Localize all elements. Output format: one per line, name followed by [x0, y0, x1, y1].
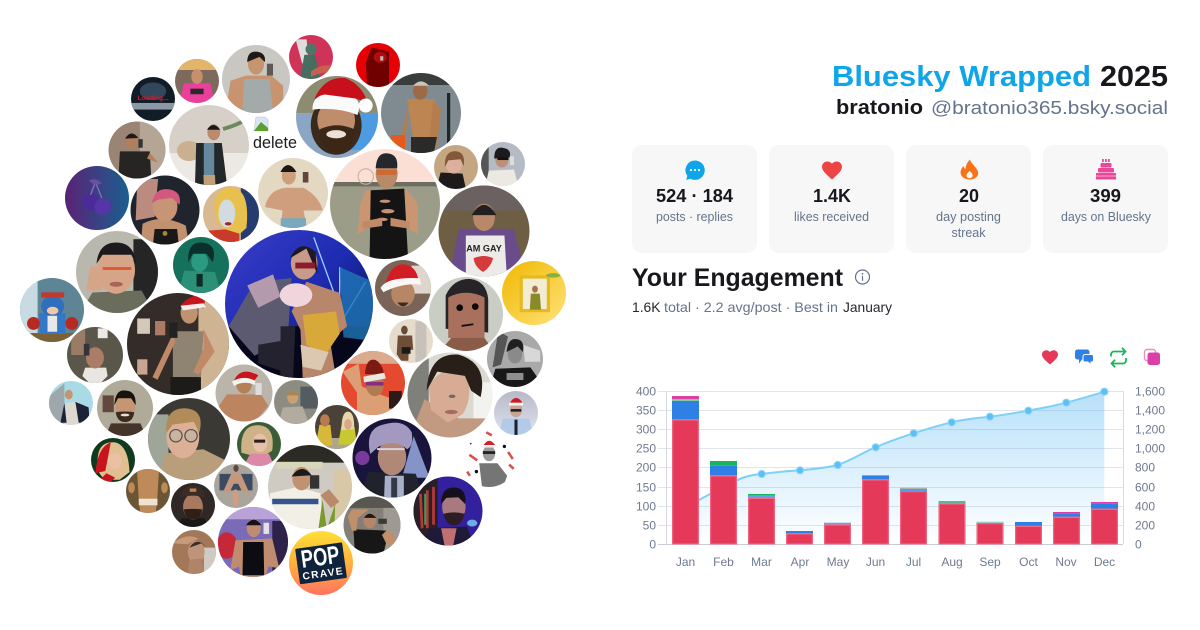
avatar: santa mirror bookshelf	[127, 293, 234, 395]
combo chart: monthly engagement	[636, 384, 1165, 569]
avatar: wet hair portrait	[408, 352, 495, 438]
icon: info	[856, 270, 870, 284]
avatar: roblox face	[429, 277, 503, 351]
icon: legend quotes	[1144, 350, 1160, 365]
avatar: broken image placeholder	[253, 117, 297, 152]
avatar: neon purple beard	[414, 476, 482, 546]
avatar: santa muscle	[216, 364, 272, 422]
stat label: day posting	[936, 210, 1001, 224]
bar: Oct	[1015, 522, 1042, 544]
bar: Aug	[938, 501, 966, 544]
month labels: Jun	[866, 555, 885, 569]
avatar: drag queens	[315, 405, 359, 449]
avatar: black tee arm up	[344, 496, 400, 554]
chart legend	[1042, 348, 1160, 367]
left axis labels: 300	[636, 422, 656, 436]
panel: day posting streak	[906, 145, 1031, 253]
stat value: 20	[959, 186, 979, 206]
avatar: bearded smile	[97, 380, 153, 436]
avatar: sunglasses white shirt	[481, 142, 525, 186]
avatar: santa smile	[375, 260, 431, 316]
bar: Jan	[672, 396, 699, 544]
left axis labels: 400	[636, 384, 656, 398]
month labels: Jul	[906, 555, 921, 569]
month labels: May	[827, 555, 849, 569]
month labels: Oct	[1019, 555, 1038, 569]
month labels: Mar	[751, 555, 772, 569]
bar: Sep	[976, 522, 1004, 544]
icon: cake	[1096, 159, 1116, 180]
right axis labels: 1,000	[1135, 442, 1165, 456]
avatar: light blue outdoors	[49, 381, 93, 425]
left axis labels	[636, 384, 656, 552]
bar: Nov	[1053, 512, 1080, 544]
display name: bratonio	[836, 97, 923, 119]
month labels: Sep	[979, 555, 1001, 569]
avatar: beanie beard	[171, 483, 215, 527]
bar: Feb	[710, 461, 737, 544]
icon: legend heart	[1042, 350, 1058, 364]
avatar: festival ripped tank	[330, 149, 440, 262]
avatar: hand on face	[172, 530, 217, 574]
right axis labels: 600	[1135, 480, 1155, 494]
month labels: Nov	[1055, 555, 1077, 569]
avatar: AM GAY shirt	[438, 186, 530, 276]
bar: Dec	[1091, 502, 1118, 544]
right axis labels: 1,400	[1135, 404, 1165, 418]
engagement summary: January	[843, 299, 892, 315]
stat label: streak	[952, 226, 986, 240]
avatar: bedroom mirror selfie	[169, 105, 249, 185]
left axis labels: 350	[636, 404, 656, 418]
avatar: cherries	[65, 166, 129, 230]
avatar: gray tank selfie	[222, 45, 290, 113]
icon: legend replies	[1075, 350, 1094, 365]
bar: Jun	[862, 475, 889, 544]
avatar: small tee sunglasses	[274, 380, 318, 424]
avatar: gym shirtless	[381, 73, 461, 153]
avatar: loading palm	[131, 77, 175, 121]
cumulative line	[686, 392, 1104, 508]
avatar: santa hat beard	[296, 76, 382, 158]
avatar: seated figure	[214, 464, 258, 508]
grid lines	[658, 391, 1124, 544]
avatar: brown bob	[434, 145, 478, 189]
bar: Mar	[748, 494, 775, 544]
avatar: green tinted	[173, 237, 229, 293]
stat value: 399	[1090, 186, 1121, 206]
stat label: days on Bluesky	[1061, 210, 1152, 224]
handle: @bratonio365.bsky.social	[931, 98, 1168, 118]
panel: days on Bluesky	[1043, 145, 1168, 253]
bar: Jul	[900, 488, 927, 544]
avatar: blonde woman green	[237, 422, 281, 466]
right axis labels: 1,200	[1135, 422, 1165, 436]
avatar: underwear torso	[126, 469, 170, 513]
avatar: silver hair suit	[352, 418, 432, 498]
engagement summary: total · 2.2 avg/post · Best in	[664, 299, 838, 315]
right axis labels: 200	[1135, 518, 1155, 532]
left axis labels: 50	[643, 518, 656, 532]
month labels: Aug	[941, 555, 963, 569]
avatar: blue wolf character	[20, 278, 84, 343]
avatar: shirtless tan	[258, 158, 328, 229]
title: Bluesky Wrapped: Bluesky Wrapped	[832, 61, 1091, 93]
left axis labels: 150	[636, 480, 656, 494]
avatar: santa sticker	[461, 431, 517, 487]
title block	[832, 61, 1168, 119]
panel: posts and replies	[632, 145, 757, 253]
right axis labels: 800	[1135, 460, 1155, 474]
engagement summary: 1.6K	[632, 299, 661, 315]
avatar: santa red wall	[341, 351, 405, 415]
stat label: posts · replies	[656, 210, 733, 224]
icon: heart	[822, 162, 842, 180]
left axis labels: 250	[636, 442, 656, 456]
panel: likes received	[769, 145, 894, 253]
avatar: big dance party	[225, 230, 373, 385]
stat value: 1.4K	[813, 186, 851, 206]
title: year: 2025	[1100, 61, 1168, 93]
right axis labels: 400	[1135, 500, 1155, 514]
avatar: red silhouette	[356, 43, 400, 87]
month labels: Feb	[713, 555, 734, 569]
avatar: pink shirt	[175, 59, 219, 103]
avatar: black and white shirt	[487, 331, 543, 387]
right axis labels: 1,600	[1135, 384, 1165, 398]
stacked bars	[672, 396, 1118, 544]
engagement summary	[632, 299, 892, 315]
avatar: broken image placeholder: delete	[253, 133, 297, 152]
avatar: black shirt mirror	[108, 122, 166, 178]
stat value: 524 · 184	[656, 186, 733, 206]
avatar: upside down selfie	[67, 327, 123, 383]
avatar: blonde glasses	[148, 398, 230, 480]
left axis labels: 200	[636, 460, 656, 474]
stat label	[936, 210, 1001, 240]
avatar: black tank purple	[216, 507, 290, 577]
left axis labels: 0	[649, 538, 656, 552]
icon: speech bubble	[685, 160, 705, 180]
avatar: santa blue shirt	[494, 391, 538, 435]
icon: legend reposts	[1111, 348, 1126, 367]
left axis labels: 100	[636, 500, 656, 514]
avatar bubble cluster	[20, 35, 566, 595]
avatar: santa woman	[91, 438, 135, 482]
avatar: cartoon blonde	[203, 186, 260, 242]
heading: your engagement: Your Engagement	[632, 264, 844, 292]
icon: flame	[961, 160, 978, 180]
right axis labels: 0	[1135, 538, 1142, 552]
cumulative area	[686, 392, 1104, 544]
month labels: Apr	[791, 555, 809, 569]
month labels: Dec	[1094, 555, 1115, 569]
right axis labels	[1135, 384, 1165, 552]
avatar: pink hair	[130, 176, 200, 244]
avatar: mirror tattoo	[389, 319, 433, 363]
avatar: pop crave logo	[289, 531, 353, 595]
avatar: red pink illustration	[289, 35, 333, 79]
cumulative points	[758, 388, 1108, 478]
month labels: Jan	[676, 555, 695, 569]
stat label: likes received	[794, 210, 869, 224]
month labels	[676, 555, 1115, 569]
avatar: white tee mirror	[268, 445, 354, 529]
bar: May	[824, 523, 851, 544]
avatar: yellow frame	[502, 261, 566, 325]
avatar: face selfie	[76, 231, 162, 313]
bar: Apr	[786, 531, 813, 544]
